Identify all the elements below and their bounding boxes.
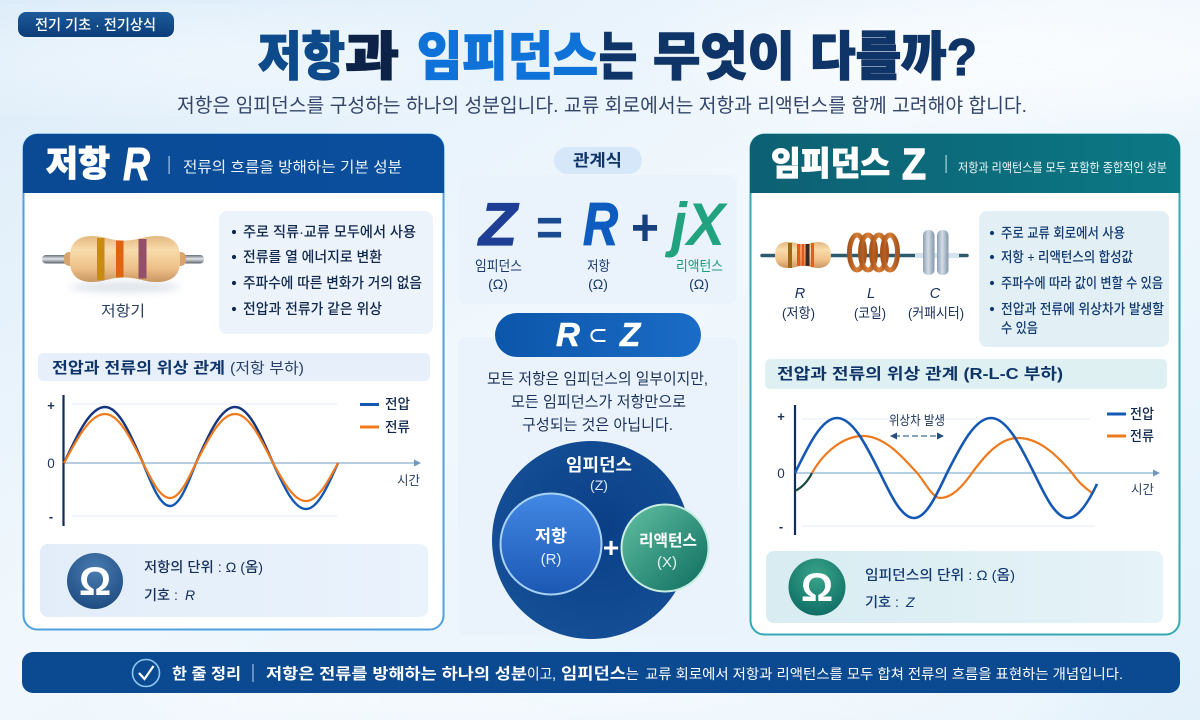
panel header: impedance — [750, 134, 1180, 193]
chart: RLC phase: 0 — [777, 466, 785, 481]
RLC labels: L — [867, 286, 875, 302]
explanation panel: 구성되는 것은 아닙니다. — [522, 416, 673, 434]
chart: RLC phase — [777, 405, 1160, 535]
unit box: impedance: 기호 : — [865, 594, 899, 610]
subset pill — [495, 313, 701, 357]
unit box: impedance: 임피던스의 단위 : Ω (옴) — [865, 567, 1015, 583]
phase heading: resistance: (저항 부하) — [230, 360, 304, 377]
bullet list: impedance: 수 있음 — [1001, 320, 1038, 336]
formula panel: = — [536, 199, 563, 257]
formula panel: 임피던스 — [475, 258, 522, 274]
phase heading: resistance — [38, 353, 430, 381]
panel header: impedance: Z — [902, 140, 926, 189]
phase heading: impedance — [765, 359, 1167, 389]
phase heading: impedance: 전압과 전류의 위상 관계 (R-L-C 부하) — [777, 365, 1063, 383]
formula panel: 저항 — [587, 258, 610, 274]
summary bar: 저항은 전류를 방해하는 하나의 성분 — [266, 665, 527, 683]
bullet list: resistance: 주로 직류·교류 모두에서 사용 — [243, 224, 416, 241]
formula panel: (Ω) — [689, 276, 709, 292]
title: 다를까? — [810, 29, 977, 87]
chart: resistive phase — [47, 395, 421, 526]
formula panel: (Ω) — [488, 276, 508, 292]
chart: resistive phase: - — [49, 509, 53, 524]
explanation panel — [458, 337, 737, 639]
panel: impedance — [750, 134, 1180, 634]
bullet list: impedance — [979, 211, 1169, 347]
icon: check — [132, 660, 160, 686]
bullet list: resistance: 전압과 전류가 같은 위상 — [243, 301, 382, 318]
title: 과 — [345, 29, 399, 87]
chart: RLC phase: 시간 — [1131, 482, 1154, 497]
chart: resistive phase: 0 — [47, 456, 55, 471]
diagram: Z contains R and X: (X) — [657, 554, 677, 571]
bullet list: impedance: 주파수에 따라 값이 변할 수 있음 — [1001, 275, 1163, 291]
icon: resistor — [42, 236, 204, 292]
unit box: impedance: Z — [905, 594, 915, 610]
unit box: resistance — [40, 544, 428, 617]
formula panel: Z — [477, 191, 519, 258]
title — [258, 29, 977, 87]
relation label — [554, 147, 642, 174]
summary bar: 이고, — [527, 666, 556, 683]
icon: R-L-C circuit — [762, 230, 967, 275]
bullet list: resistance — [219, 211, 433, 334]
diagram: Z contains R and X: 저항 — [535, 527, 567, 546]
formula panel: (Ω) — [588, 276, 608, 292]
icon: ohm: Ω — [79, 560, 111, 604]
subtitle: 저항은 임피던스를 구성하는 하나의 성분입니다. 교류 회로에서는 저항과 리액턴스를 함께 고려해야 합니다. — [177, 95, 1027, 117]
diagram: Z contains R and X — [492, 441, 708, 639]
chart: resistive phase: + — [47, 398, 55, 413]
unit box: resistance: R — [185, 587, 195, 603]
chart: RLC phase: 전류 — [1130, 428, 1154, 444]
explanation panel: 모든 임피던스가 저항만으로 — [511, 393, 686, 411]
phase heading: resistance: 전압과 전류의 위상 관계 — [52, 359, 225, 377]
icon: ohm — [67, 553, 123, 609]
RLC labels: C — [930, 286, 941, 302]
title: 저항 — [258, 29, 345, 87]
summary bar: 임피던스 — [561, 665, 626, 683]
icon: ohm green — [788, 558, 846, 616]
RLC labels: (저항) — [782, 305, 815, 321]
title: 는 — [599, 29, 637, 87]
bullet list: resistance: 전류를 열 에너지로 변환 — [243, 249, 382, 266]
panel header: resistance: R — [123, 138, 150, 190]
chart: RLC phase: - — [779, 519, 783, 534]
diagram: Z contains R and X: (Z) — [590, 477, 608, 493]
summary bar: 한 줄 정리 — [172, 665, 241, 683]
subset pill: Z — [619, 316, 642, 353]
summary bar: 교류 회로에서 저항과 리액턴스를 모두 합쳐 전류의 흐름을 표현하는 개념입니다. — [645, 666, 1123, 682]
chart: resistive phase: 전압 — [385, 396, 410, 412]
explanation panel: 모든 저항은 임피던스의 일부이지만, — [487, 370, 708, 388]
formula panel: + — [631, 199, 659, 257]
bullet list: resistance: 주파수에 따른 변화가 거의 없음 — [243, 275, 422, 292]
panel header: resistance — [23, 134, 444, 193]
formula panel — [458, 175, 737, 304]
formula panel: 리액턴스 — [676, 258, 723, 274]
RLC labels: R — [795, 286, 806, 302]
chart: RLC phase: + — [777, 409, 785, 424]
RLC labels: (코일) — [854, 305, 886, 321]
diagram: Z contains R and X: + — [603, 532, 619, 563]
summary bar — [22, 652, 1180, 693]
chart: resistive phase: 전류 — [385, 419, 410, 435]
diagram: Z contains R and X: 리액턴스 — [639, 532, 697, 550]
category tag: 전기 기초 · 전기상식 — [35, 17, 156, 34]
subset pill: ⊂ — [588, 326, 608, 348]
diagram: Z contains R and X: 임피던스 — [566, 455, 632, 475]
formula panel: R — [583, 191, 618, 258]
unit box: resistance: 기호 : — [144, 587, 178, 603]
diagram: Z contains R and X: (R) — [541, 551, 561, 568]
chart: RLC phase: 전압 — [1130, 406, 1154, 422]
bullet list: impedance: 저항 + 리액턴스의 합성값 — [1001, 249, 1133, 265]
icon: ohm green: Ω — [801, 566, 833, 610]
formula panel: jX — [664, 191, 729, 258]
resistor label: 저항기 — [101, 303, 145, 320]
bullet list: impedance: 전압과 전류에 위상차가 발생할 — [1001, 301, 1164, 317]
RLC labels — [782, 286, 964, 321]
summary bar: 는 — [626, 666, 639, 683]
panel header: impedance: 저항과 리액턴스를 모두 포함한 종합적인 성분 — [958, 161, 1167, 175]
panel header: resistance: 저항 — [46, 145, 110, 184]
bullet list: impedance: 주로 교류 회로에서 사용 — [1001, 225, 1125, 241]
category tag — [18, 12, 174, 37]
panel: resistance — [23, 134, 444, 630]
chart: resistive phase: 시간 — [397, 473, 420, 488]
panel header: impedance: 임피던스 — [771, 145, 890, 182]
title: 무엇이 — [653, 29, 795, 87]
RLC labels: (커패시터) — [908, 305, 964, 321]
chart: RLC phase: 위상차 발생 — [889, 413, 945, 428]
title: 임피던스 — [417, 29, 598, 87]
panel header: resistance: 전류의 흐름을 방해하는 기본 성분 — [183, 159, 402, 176]
unit box: impedance — [766, 551, 1163, 623]
relation label: 관계식 — [573, 151, 622, 170]
subset pill: R — [556, 316, 580, 353]
unit box: resistance: 저항의 단위 : Ω (옴) — [144, 559, 263, 575]
